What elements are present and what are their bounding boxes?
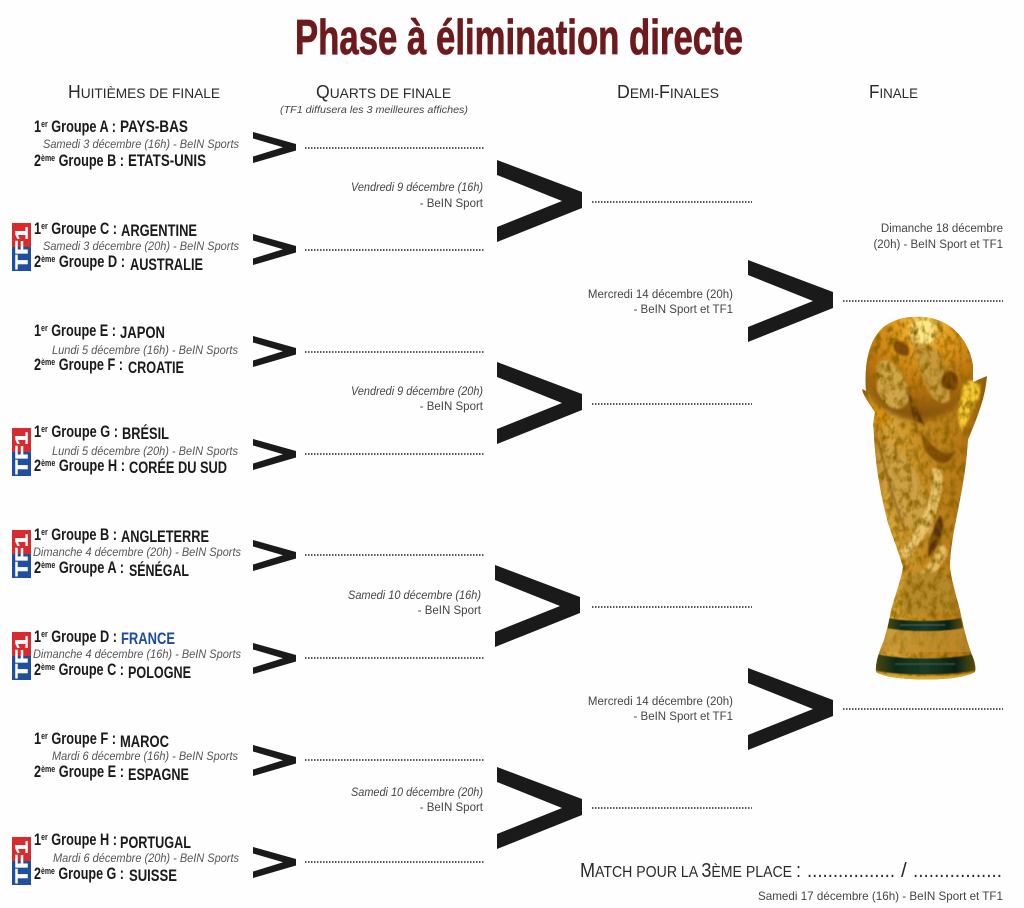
match 7: 2 (34, 763, 43, 781)
match 2 (34, 220, 239, 274)
match 7: MAROC (120, 733, 169, 751)
match 6: Groupe C : (55, 661, 124, 679)
date: quarter 3: Samedi 10 décembre (16h) (348, 590, 481, 602)
match 2: Groupe D : (55, 253, 125, 271)
match 3: 2 (34, 356, 43, 374)
column headings (68, 82, 918, 116)
match 8: Groupe G : (55, 865, 124, 883)
match 1: ème (41, 153, 55, 163)
match 1: ETATS-UNIS (128, 152, 206, 170)
match 3: Groupe E : (48, 322, 116, 340)
match 5 (33, 526, 241, 580)
match 6: 1 (34, 628, 43, 646)
broadcaster: semi 1: - BeIN Sport et TF1 (634, 304, 733, 316)
match 3: er (41, 323, 48, 333)
match 2: ème (41, 254, 55, 264)
match 6: Dimanche 4 décembre (16h) - BeIN Sports (33, 649, 241, 661)
match 2: 1 (34, 220, 43, 238)
icon: TF1 logo match 6: TF1 (13, 635, 32, 678)
match 8: SUISSE (129, 867, 177, 885)
slash: / (901, 859, 907, 882)
match 1: er (41, 119, 48, 129)
match 1: PAYS-BAS (120, 118, 188, 136)
match 8: Groupe H : (48, 831, 117, 849)
match 5: ANGLETERRE (121, 528, 209, 546)
match 6: 2 (34, 661, 43, 679)
semi-final dates (588, 289, 733, 723)
TF1 logos (12, 223, 32, 885)
match 7: ESPAGNE (128, 766, 189, 784)
match 6 (33, 628, 241, 682)
icon: World Cup trophy (862, 316, 987, 680)
match 7: Groupe F : (48, 730, 116, 748)
match 2: er (41, 221, 48, 231)
match 7: er (41, 731, 48, 741)
match 4: 1 (34, 423, 43, 441)
match 4 (34, 423, 238, 477)
match 7 (34, 730, 238, 784)
third place date: Samedi 17 décembre (16h) - BeIN Sport et TF1 (758, 889, 1003, 903)
match 8: PORTUGAL (120, 834, 191, 852)
match 1: Groupe B : (55, 152, 124, 170)
match 3: CROATIE (128, 359, 184, 377)
final date (873, 223, 1003, 251)
answer dots: team 2: ................. (913, 859, 1002, 882)
final date: (20h) - BeIN Sport et TF1 (873, 239, 1003, 251)
match 2: 2 (34, 253, 43, 271)
match 8: 1 (34, 831, 43, 849)
heading: quarts: QUARTS DE FINALE (316, 82, 451, 102)
match 5: 1 (34, 526, 43, 544)
match 7: 1 (34, 730, 43, 748)
match 6: er (41, 629, 48, 639)
icon: TF1 logo match 8: TF1 (13, 840, 32, 884)
match 5: er (41, 527, 48, 537)
icon: TF1 logo match 2: TF1 (13, 226, 32, 270)
match 4: Groupe G : (48, 423, 118, 441)
match 2: ARGENTINE (121, 222, 197, 240)
date: quarter 2: Vendredi 9 décembre (20h) (351, 386, 483, 398)
round of 16 matches (33, 118, 241, 885)
label: third place: MATCH POUR LA 3ÈME PLACE : (580, 859, 801, 882)
match 4: Groupe H : (55, 457, 125, 475)
date: quarter 4: Samedi 10 décembre (20h) (351, 787, 483, 799)
title: Phase à élimination directe (295, 11, 743, 65)
quarter-final answer lines (305, 148, 485, 862)
third place match (580, 859, 1002, 882)
match 8: 2 (34, 865, 43, 883)
date: quarter 1: Vendredi 9 décembre (16h) (351, 182, 483, 194)
quarter-final dates (348, 182, 484, 814)
match 6: FRANCE (121, 630, 175, 648)
match 1: Samedi 3 décembre (16h) - BeIN Sports (43, 139, 239, 151)
match 1: 2 (34, 152, 43, 170)
match 4: ème (41, 458, 55, 468)
match 4: er (41, 424, 48, 434)
heading: demi-finales: DEMI-FINALES (617, 82, 719, 102)
match 4: 2 (34, 457, 43, 475)
heading: huitièmes: HUITIÈMES DE FINALE (68, 82, 220, 102)
icon: TF1 logo match 4: TF1 (13, 431, 32, 474)
date: semi 1: Mercredi 14 décembre (20h) (588, 289, 733, 301)
match 4: BRÉSIL (122, 424, 169, 443)
match 4: CORÉE DU SUD (129, 458, 227, 477)
match 3: 1 (34, 322, 43, 340)
match 5: SÉNÉGAL (129, 561, 189, 580)
match 6: POLOGNE (128, 664, 191, 682)
date: semi 2: Mercredi 14 décembre (20h) (588, 696, 733, 708)
match 2: Groupe C : (48, 220, 117, 238)
match 5: Dimanche 4 décembre (20h) - BeIN Sports (33, 547, 241, 559)
match 8: er (41, 832, 48, 842)
match 8 (34, 831, 239, 885)
match 5: 2 (34, 559, 43, 577)
match 3 (34, 322, 238, 377)
match 3: Lundi 5 décembre (16h) - BeIN Sports (52, 345, 238, 357)
match 3: JAPON (120, 324, 165, 342)
broadcaster: quarter 1: - BeIN Sport (420, 198, 484, 210)
match 7: ème (41, 764, 55, 774)
match 5: Groupe B : (48, 526, 117, 544)
match 4: Lundi 5 décembre (20h) - BeIN Sports (52, 446, 238, 458)
broadcaster: quarter 4: - BeIN Sport (420, 802, 484, 814)
match 6: Groupe D : (48, 628, 117, 646)
match 5: Groupe A : (55, 559, 124, 577)
broadcaster: quarter 2: - BeIN Sport (420, 401, 484, 413)
match 7: Groupe E : (55, 763, 124, 781)
heading: finale: FINALE (869, 82, 918, 102)
match 1 (34, 118, 239, 170)
match 8: Mardi 6 décembre (20h) - BeIN Sports (53, 853, 239, 865)
match 6: ème (41, 662, 55, 672)
final answer lines (843, 301, 1003, 709)
icon: TF1 logo match 5: TF1 (13, 533, 32, 576)
large arrows (495, 160, 833, 849)
broadcaster: semi 2: - BeIN Sport et TF1 (634, 711, 733, 723)
final date: Dimanche 18 décembre (881, 223, 1003, 235)
note: TF1: (TF1 diffusera les 3 meilleures affiches) (280, 104, 468, 116)
match 3: Groupe F : (55, 356, 123, 374)
answer dots: team 1: ................. (807, 859, 895, 882)
match 1: Groupe A : (48, 118, 116, 136)
match 1: 1 (34, 118, 43, 136)
match 2: Samedi 3 décembre (20h) - BeIN Sports (43, 241, 239, 253)
match 5: ème (41, 560, 55, 570)
small arrows (253, 132, 296, 878)
semi-final answer lines (592, 202, 752, 808)
match 3: ème (41, 357, 55, 367)
match 7: Mardi 6 décembre (16h) - BeIN Sports (52, 751, 238, 763)
broadcaster: quarter 3: - BeIN Sport (418, 605, 482, 617)
match 8: ème (41, 866, 55, 876)
match 2: AUSTRALIE (130, 256, 203, 274)
